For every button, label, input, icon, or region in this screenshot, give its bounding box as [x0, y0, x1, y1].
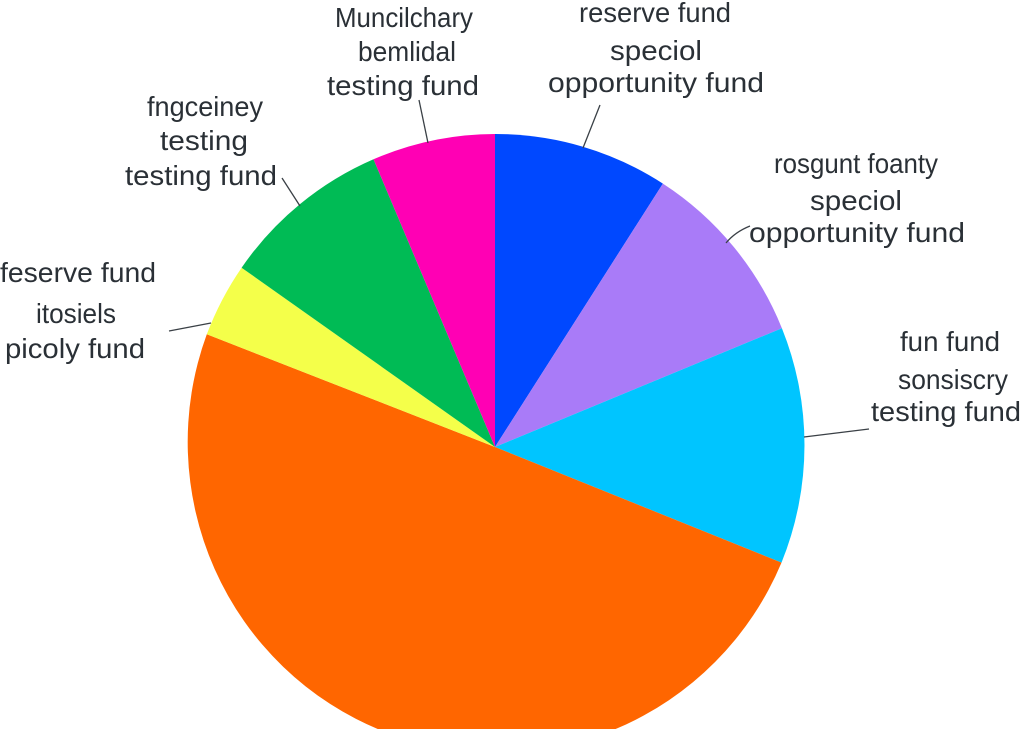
label: upper left: fngceiney — [147, 91, 263, 122]
label: top centre-right — [548, 0, 764, 98]
label: right upper: speciol — [810, 185, 902, 216]
slice: magenta — [374, 134, 495, 447]
slice: orange — [188, 334, 782, 729]
slice: yellow — [207, 268, 495, 447]
label: right lower — [871, 326, 1021, 427]
label: left — [0, 257, 156, 364]
slice: purple — [495, 184, 782, 447]
label: left: itosiels — [36, 298, 116, 329]
label: right upper: rosgunt foanty — [774, 148, 938, 179]
label: left: feserve fund — [0, 257, 156, 288]
slice: green — [242, 159, 495, 447]
label: top centre-left — [327, 2, 479, 101]
label: top centre-left: testing fund — [327, 70, 479, 101]
label: right upper: opportunity fund — [749, 217, 965, 248]
label: left: picoly fund — [5, 333, 145, 364]
label: top centre-right: speciol — [610, 35, 702, 66]
label: right lower: fun fund — [900, 326, 1000, 357]
label: top centre-right: opportunity fund — [548, 67, 764, 98]
slice: cyan — [495, 328, 804, 563]
label: top centre-left: bemlidal — [358, 36, 456, 67]
label: right lower: sonsiscry — [898, 364, 1008, 395]
label: upper left: testing — [160, 125, 248, 156]
label: right upper — [749, 148, 965, 248]
label: top centre-left: Muncilchary — [335, 2, 473, 33]
label: right lower: testing fund — [871, 396, 1021, 427]
label: upper left — [125, 91, 277, 191]
pie chart — [188, 134, 804, 729]
leader lines — [169, 100, 869, 437]
label: upper left: testing fund — [125, 160, 277, 191]
slice: blue — [495, 134, 663, 447]
